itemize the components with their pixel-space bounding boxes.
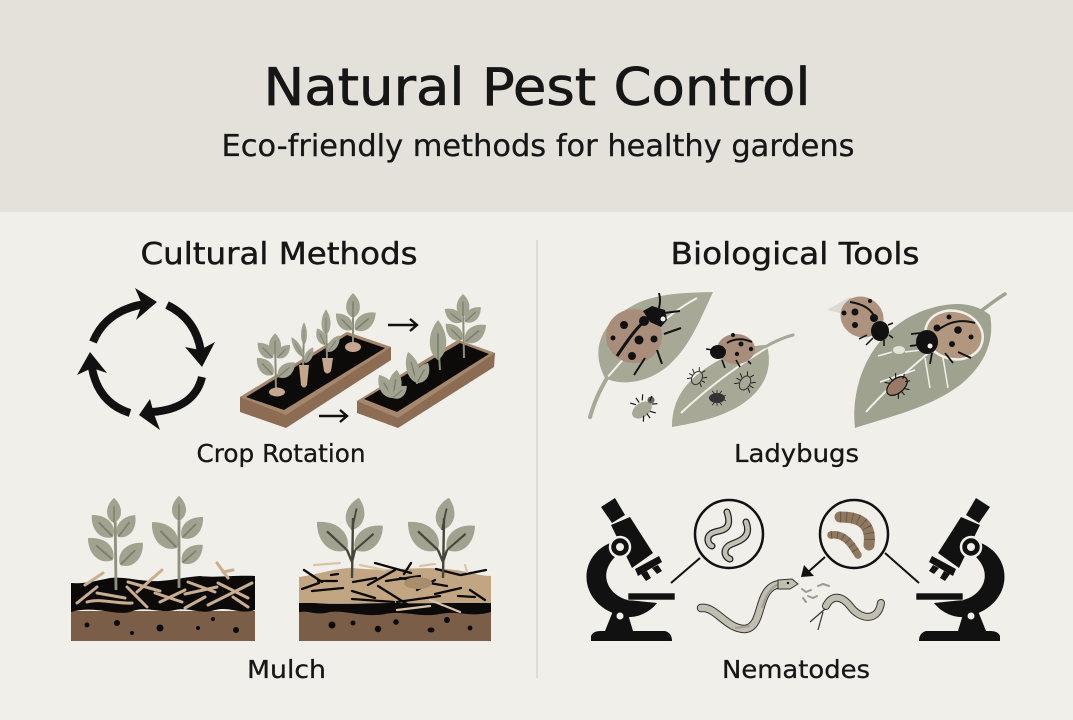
heading: Cultural Methods: Cultural Methods [140, 237, 418, 272]
title: Natural Pest Control [264, 58, 810, 118]
label: Ladybugs: Ladybugs [734, 439, 859, 468]
illustration: small nematode [810, 598, 881, 630]
magnifier: left circle with nematodes [671, 500, 763, 583]
arrow: bed rotation upper [388, 319, 417, 331]
label: Nematodes: Nematodes [722, 655, 870, 684]
column divider [536, 240, 538, 678]
arrow: magnifier to nematode [801, 557, 825, 577]
illustration: ladybugs on right leaf [827, 289, 1005, 428]
icon: right microscope [916, 498, 1005, 641]
label: Mulch: Mulch [247, 655, 326, 684]
icon: crop rotation cycle arrows [77, 288, 215, 430]
illustration: thick mulch soil section [299, 496, 491, 641]
illustration: ladybugs on left leaves [590, 292, 793, 427]
illustration: raised bed two with leafy crops [357, 294, 495, 428]
arrow: bed rotation lower [319, 410, 347, 422]
heading: Biological Tools: Biological Tools [670, 237, 920, 272]
subtitle: Eco-friendly methods for healthy gardens [222, 129, 855, 164]
magnifier: right circle with larvae [820, 500, 919, 583]
illustration: large nematode [701, 579, 798, 629]
label: Crop Rotation: Crop Rotation [196, 439, 366, 468]
illustration: thin mulch soil section [71, 496, 255, 641]
icon: left microscope [586, 498, 675, 641]
header band [0, 0, 1073, 212]
icon: motion squiggles [802, 584, 829, 602]
illustration: raised bed one with root crops [240, 293, 391, 428]
